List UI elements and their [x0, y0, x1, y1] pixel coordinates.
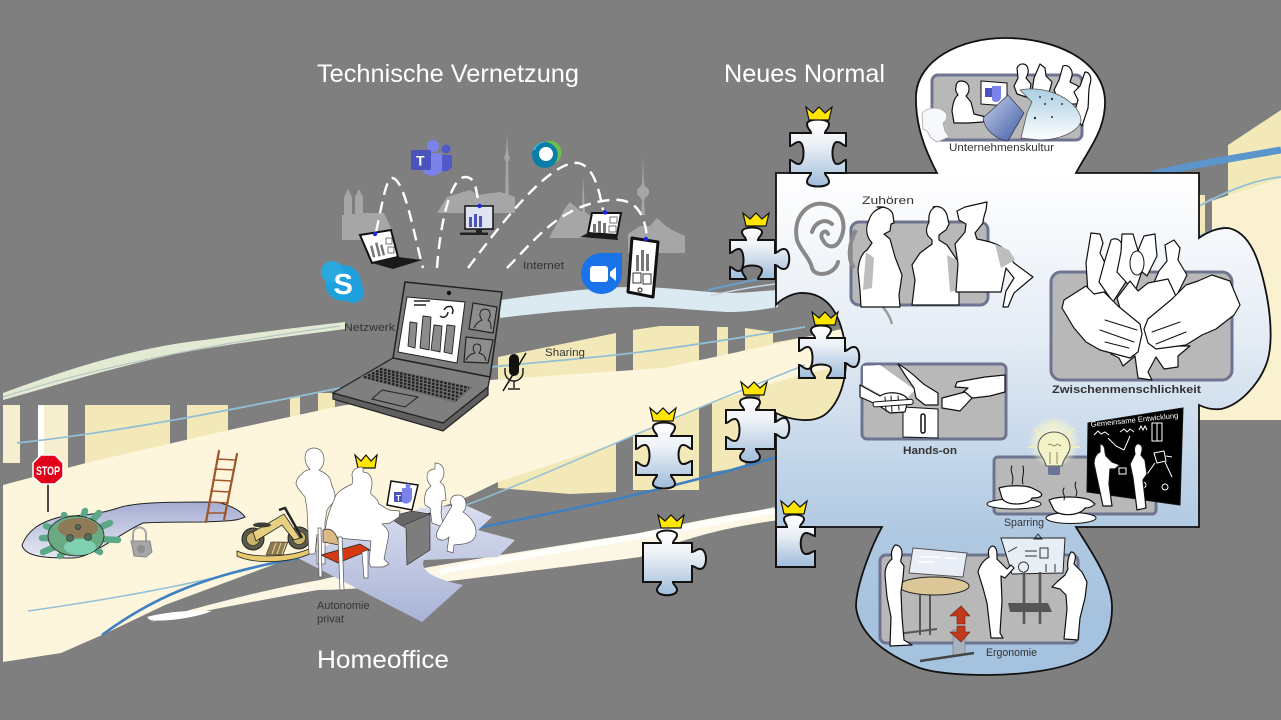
- hand right: [1144, 275, 1240, 349]
- icon: Google Duo: [581, 253, 622, 294]
- table column and base: [920, 630, 974, 661]
- hand left: [1062, 286, 1142, 358]
- label: Internet: Internet: [523, 260, 564, 272]
- label: Ergonomie: [986, 647, 1037, 659]
- puzzle piece with crown: notch: [799, 312, 859, 378]
- desk screen: [909, 548, 967, 577]
- icon: Skype: [321, 261, 364, 303]
- group of colleagues: [1014, 64, 1091, 126]
- board heading: Gemeinsame Entwicklung: [1090, 411, 1179, 429]
- section: Unternehmenskultur: [922, 64, 1091, 154]
- computer monitor: [387, 481, 418, 510]
- metal plate: [903, 407, 938, 438]
- title: Neues Normal: Neues Normal: [724, 60, 885, 88]
- title: Technische Vernetzung: Technische Vernetzung: [317, 60, 579, 88]
- person at board right: [1130, 444, 1147, 510]
- section: Zwischenmenschlichkeit: [1051, 233, 1240, 396]
- puzzle piece with crown: lower notch: [726, 382, 789, 462]
- whiteboard: [1001, 534, 1065, 624]
- river: upper network band: [3, 277, 778, 400]
- chair: [318, 528, 370, 590]
- title: Homeoffice: Homeoffice: [317, 646, 449, 674]
- section: Sparring: [987, 416, 1156, 529]
- icon: padlock: [131, 528, 152, 557]
- person: standing adult silhouette: [296, 448, 335, 564]
- label: Sparring: [1004, 517, 1044, 529]
- computer monitor: T: [396, 494, 401, 503]
- person: woman: [858, 207, 902, 307]
- pointing hand: [955, 375, 1005, 398]
- river: blue and pale lines: [17, 150, 1281, 635]
- icon: light bulb: [1028, 416, 1080, 475]
- icon: Microsoft Teams: T: [416, 152, 425, 168]
- icon: muted microphone: [503, 353, 526, 391]
- icon: stop sign: STOP: [36, 466, 60, 478]
- icon: Microsoft Teams: [411, 140, 452, 176]
- icon: crown for home worker: [355, 455, 377, 468]
- section: Hands-on: [860, 364, 1006, 457]
- label: Netzwerk: Netzwerk: [344, 322, 396, 334]
- icon: ear: [796, 204, 843, 274]
- person at board left: [1094, 444, 1120, 506]
- hole in the road: [22, 502, 245, 558]
- label: Zuhören: [862, 195, 914, 207]
- desk top: [899, 577, 969, 595]
- road: cream surface: [3, 328, 846, 662]
- river: lower white streak: [147, 508, 780, 622]
- computer tower: [388, 511, 430, 565]
- puzzle piece with crown: panel corner: [776, 501, 815, 567]
- puzzle piece with crown: road lower: [643, 515, 706, 595]
- device: smartphone: [628, 237, 658, 297]
- road: right cream section: [1199, 178, 1281, 420]
- road pillars: back row: [3, 110, 1281, 494]
- label: Zwischenmenschlichkeit: [1052, 384, 1201, 396]
- second hand: [898, 364, 938, 405]
- person: standing child silhouette: [425, 463, 446, 526]
- homeoffice puzzle carpet: [296, 505, 515, 622]
- person: tall man: [955, 202, 1033, 307]
- crowd: [1086, 233, 1187, 303]
- device: laptop left: [360, 230, 422, 269]
- monitor: [981, 81, 1007, 106]
- board: [1087, 408, 1183, 505]
- person: man with sweater: [912, 206, 959, 305]
- frame: [880, 555, 1078, 643]
- section: Zuhören: [796, 195, 1033, 324]
- icon: stop sign: [33, 455, 63, 512]
- device: laptop right: [580, 210, 621, 240]
- board sketches: [1094, 423, 1172, 490]
- person: seated worker: [325, 467, 400, 567]
- icon: Skype: S: [334, 269, 353, 301]
- coffee cup left: [987, 466, 1042, 509]
- frame: [862, 364, 1006, 439]
- icon: virus: [42, 511, 118, 556]
- panel: Neues Normal puzzle piece: [776, 38, 1271, 675]
- tree/figure centre: [1111, 279, 1190, 380]
- label: Unternehmenskultur: [949, 142, 1054, 154]
- blue pie slice: [983, 95, 1024, 141]
- main laptop: [333, 282, 502, 431]
- dashed connection arcs: [376, 163, 647, 268]
- hand holding tool: [860, 385, 908, 413]
- puzzle piece with crown: road upper: [636, 408, 692, 488]
- label: Hands-on: [903, 445, 957, 457]
- person with VR headset: [922, 108, 949, 142]
- person at whiteboard left: [978, 546, 1014, 638]
- icon: ladder: [206, 451, 237, 522]
- puzzle piece with crown: Technische Vernetzung: [730, 213, 789, 279]
- puzzle piece with crown: top: [790, 107, 846, 186]
- person at whiteboard right: [1052, 552, 1087, 640]
- section: Ergonomie: [880, 534, 1087, 661]
- icon: wooden balance bike: [237, 508, 313, 562]
- frame: [851, 222, 988, 305]
- section: Gemeinsame Entwicklung blackboard: [1087, 408, 1183, 510]
- person left: [885, 545, 912, 646]
- device: desktop monitor: [460, 204, 493, 235]
- white cake: [1020, 89, 1081, 140]
- height-adjustable desk legs: [897, 595, 937, 635]
- frame: [994, 457, 1156, 514]
- label: Sharing: Sharing: [545, 347, 585, 359]
- person: crouching child silhouette: [436, 495, 476, 553]
- icon: red height arrows: [950, 606, 970, 642]
- coffee cup right: [1046, 482, 1096, 524]
- person at desk: [952, 81, 986, 123]
- city skyline: [342, 133, 685, 253]
- forearm and white patch: [863, 365, 915, 405]
- label: Autonomie privat: Autonomie: [317, 600, 370, 612]
- icon: Webex: [532, 141, 562, 168]
- label: Autonomie privat: privat: [317, 614, 344, 626]
- frame: [932, 75, 1082, 140]
- frame: [1051, 272, 1232, 380]
